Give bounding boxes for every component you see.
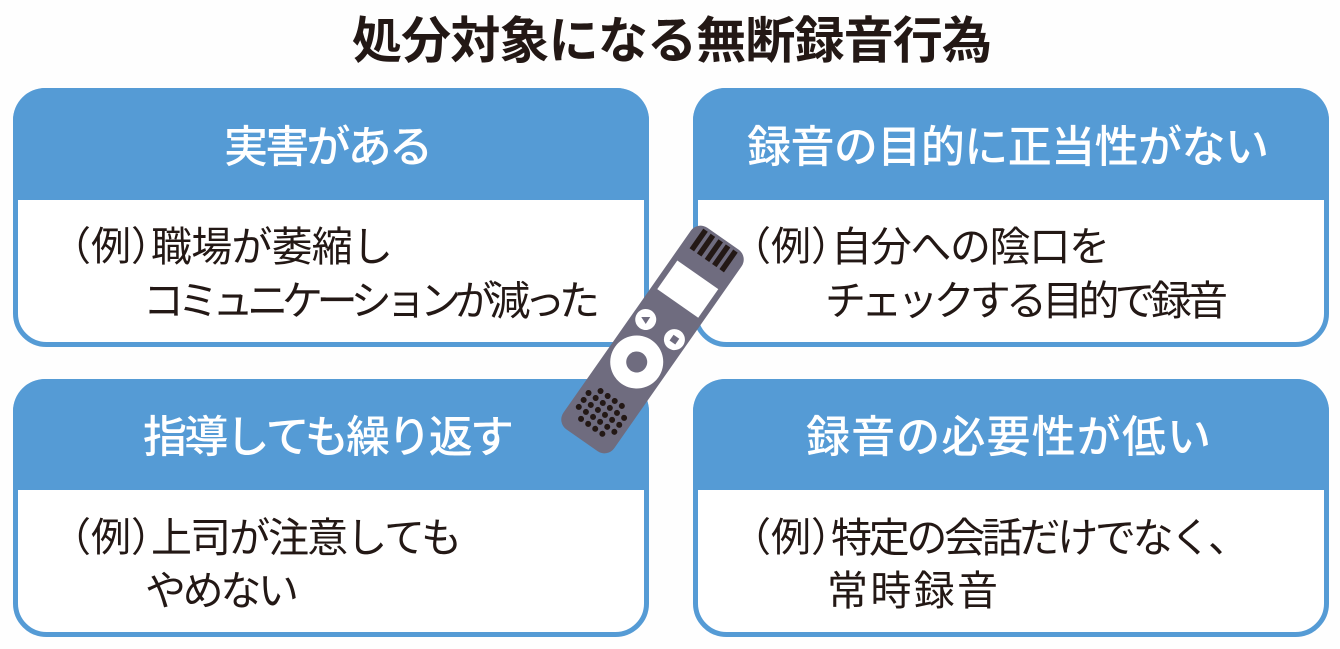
panel: 録音の必要性が低い xyxy=(693,379,1329,634)
microphone stripes xyxy=(690,229,738,272)
text block: やめない xyxy=(145,568,299,614)
text block xyxy=(51,515,462,614)
text block: 職場が萎縮し xyxy=(151,224,393,270)
text block: 上司が注意しても xyxy=(151,515,462,561)
text block: （例） xyxy=(731,516,851,560)
text block xyxy=(731,224,1228,324)
button: play xyxy=(631,305,660,334)
text block xyxy=(51,224,600,324)
text block: 特定の会話だけでなく、 xyxy=(831,515,1249,561)
heading: 録音の必要性が低い xyxy=(806,413,1211,462)
text block: （例） xyxy=(731,225,851,269)
panel: 録音の目的に正当性がない xyxy=(693,88,1329,344)
text block: 常時録音 xyxy=(827,568,998,614)
text block: コミュニケーションが減った xyxy=(143,278,600,324)
heading: 実害がある xyxy=(224,123,433,172)
screen xyxy=(657,260,718,318)
text block: 自分への陰口を xyxy=(831,224,1110,270)
panel: 実害がある xyxy=(13,88,649,344)
text block xyxy=(731,515,1249,614)
text block: （例） xyxy=(51,516,171,560)
speaker grille xyxy=(570,382,633,443)
heading: 指導しても繰り返す xyxy=(143,413,514,462)
text block: （例） xyxy=(51,225,171,269)
text block: チェックする目的で録音 xyxy=(825,278,1228,324)
control wheel xyxy=(600,325,674,399)
panel: 指導しても繰り返す xyxy=(13,379,649,634)
title: 処分対象になる無断録音行為 xyxy=(352,13,992,69)
icon: voice recorder xyxy=(557,221,748,458)
button: stop xyxy=(660,325,689,354)
heading: 録音の目的に正当性がない xyxy=(747,123,1269,172)
